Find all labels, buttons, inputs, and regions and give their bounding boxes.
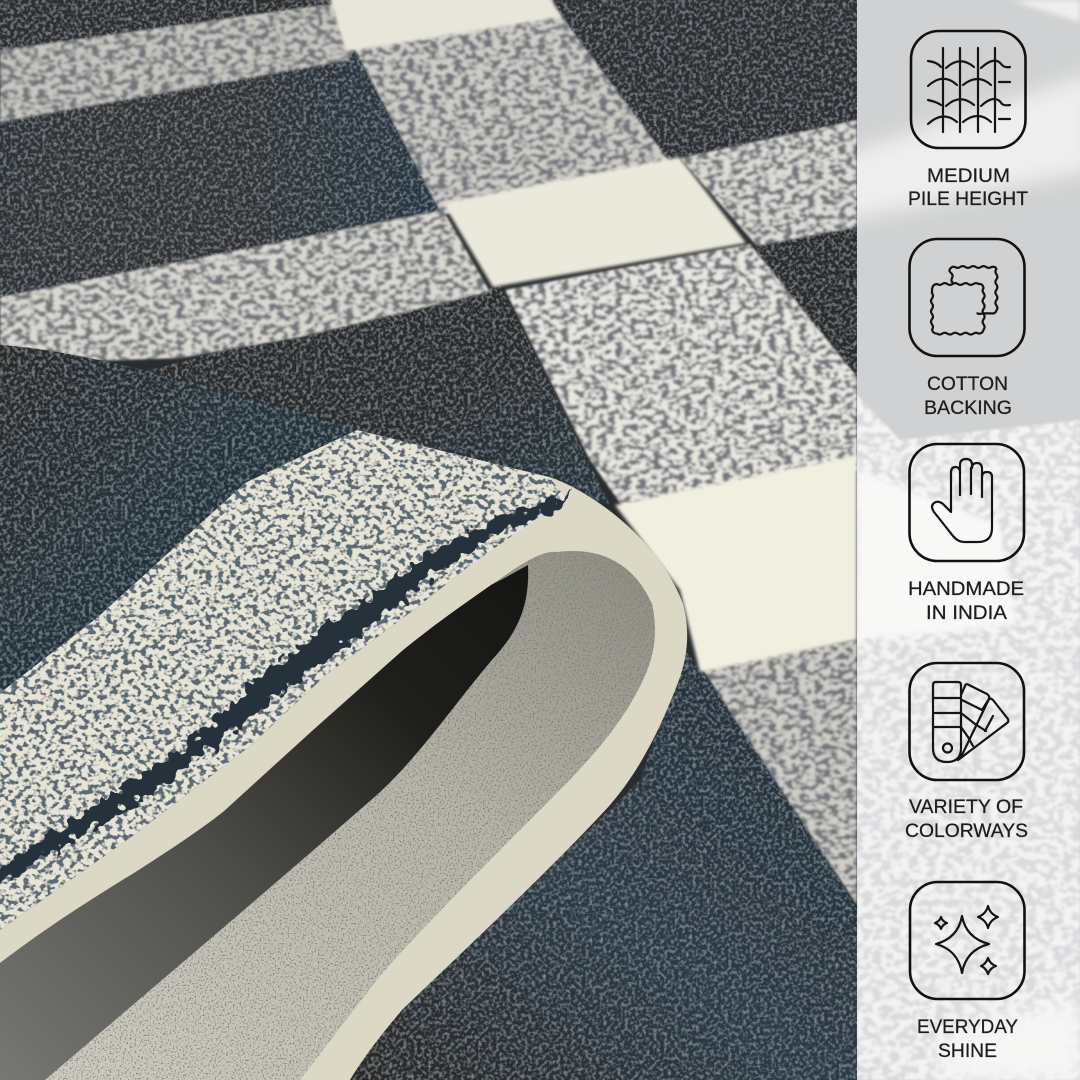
icon: hand [910, 444, 1024, 561]
icon: pile yarn grid [911, 31, 1026, 148]
panel backdrop [840, 0, 1080, 1080]
icon: colour fan deck [910, 663, 1024, 780]
rolled rug cream edge [0, 477, 687, 1080]
feature: everyday shine [910, 882, 1024, 1062]
label: variety of colorways [905, 797, 1028, 842]
feature: variety of colorways [905, 663, 1028, 842]
label: everyday shine [917, 1017, 1018, 1062]
icon: sparkles [910, 882, 1024, 999]
feature: cotton backing [910, 239, 1024, 419]
label: everyday shine: SHINE [938, 1041, 997, 1062]
rug dark squares [0, 0, 857, 1080]
label: cotton backing: BACKING [924, 398, 1012, 419]
dark edge of plaid band [0, 495, 570, 885]
label: handmade in india [908, 579, 1024, 624]
label: medium pile height [908, 166, 1028, 210]
rolled rug top face [0, 345, 357, 693]
panel: features sidebar [840, 0, 1080, 1080]
feature: handmade in india [908, 444, 1024, 624]
icon: fabric swatches [910, 239, 1024, 356]
label: handmade in india: HANDMADE [908, 579, 1024, 600]
underside of the rug [0, 551, 655, 1080]
rug woven plaid squares, out of focus [0, 2, 857, 905]
label: variety of colorways: COLORWAYS [905, 821, 1028, 842]
label: handmade in india: IN INDIA [926, 603, 1007, 624]
label: medium pile height: PILE HEIGHT [908, 189, 1028, 210]
shadowed underside [0, 565, 528, 1080]
label: variety of colorways: VARIETY OF [909, 797, 1023, 818]
rug cream squares [329, 0, 857, 672]
feature: medium pile height [908, 31, 1028, 210]
label: cotton backing: COTTON [927, 374, 1008, 395]
label: cotton backing [924, 374, 1012, 419]
label: everyday shine: EVERYDAY [917, 1017, 1018, 1038]
label: medium pile height: MEDIUM [927, 166, 1010, 187]
rolled rug plaid band [0, 430, 566, 930]
